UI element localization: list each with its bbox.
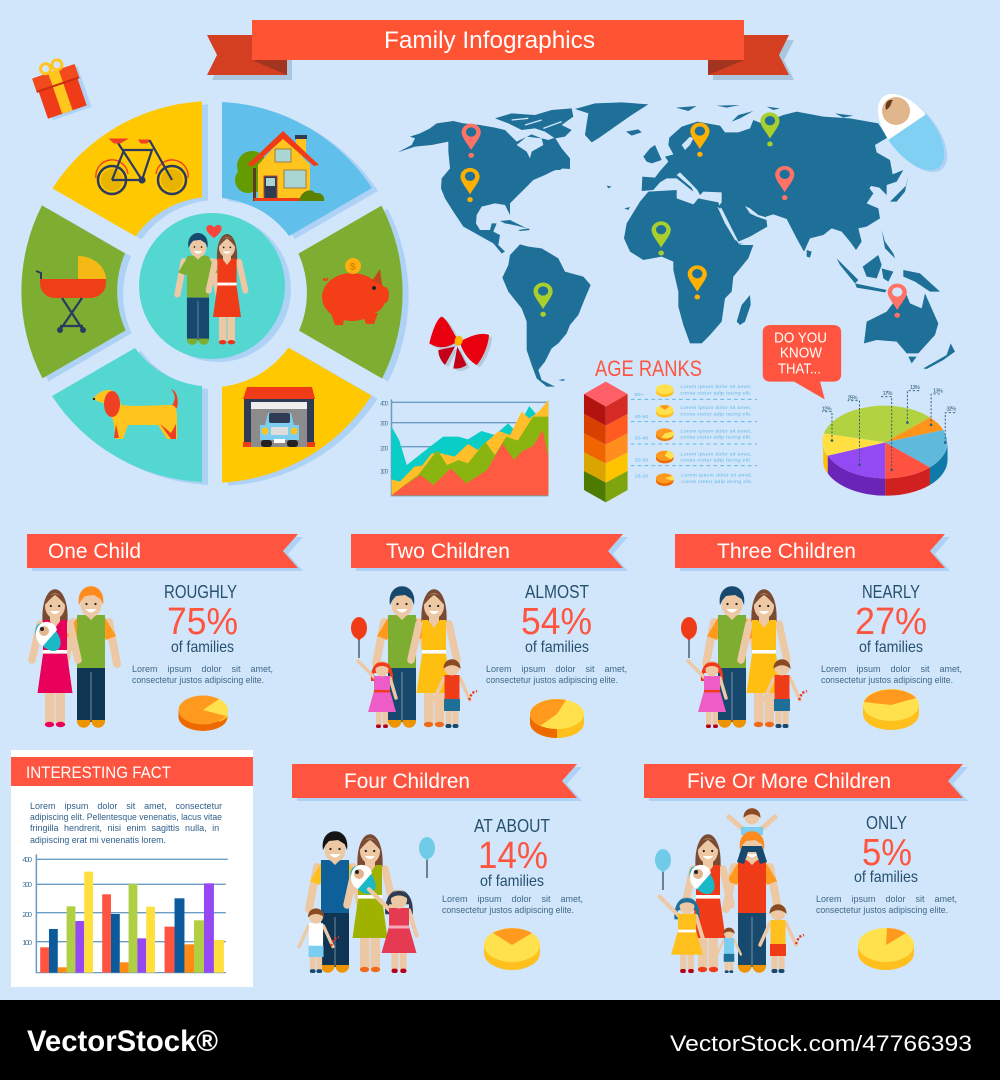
3D pie chart: 25% <box>848 396 858 402</box>
segment: house <box>222 102 372 236</box>
family figures <box>351 586 477 728</box>
3D pie chart: 13% <box>910 385 920 391</box>
age rows: conse ctetur adip iscing elit. <box>680 458 752 464</box>
age rows: Lorem ipsum dolor sit amet, <box>680 452 752 457</box>
3D pie chart: 32% <box>946 407 957 413</box>
area chart: 200 <box>380 446 389 453</box>
center circle <box>139 213 291 362</box>
age rows: conse ctetur adip iscing elit. <box>680 391 752 396</box>
child legs <box>737 846 767 864</box>
header: INTERESTING FACT <box>26 763 171 782</box>
segment: stroller <box>0 181 159 378</box>
segment: savings <box>265 206 457 403</box>
ribbon: One Child <box>48 540 141 563</box>
area chart <box>380 399 548 496</box>
ribbon <box>351 534 628 571</box>
footer watermark bar: VectorStock® <box>27 1025 218 1058</box>
family figures <box>681 586 807 728</box>
statistic: Lorem ipsum dolor sit amet, <box>132 664 273 674</box>
section: one child <box>27 534 303 731</box>
statistic <box>486 582 627 685</box>
statistic: consectetur justos adipiscing elite. <box>821 675 953 685</box>
panel: interesting fact <box>11 750 253 987</box>
age rows: 40-50 <box>634 414 648 420</box>
speech bubble <box>763 325 841 399</box>
statistic: ALMOST <box>525 582 589 602</box>
mini pie <box>858 928 914 970</box>
paragraph: adipiscing elit. Pellentesque venenatis, lacus vitae <box>30 812 222 822</box>
statistic: Lorem ipsum dolor sit amet, <box>821 664 962 674</box>
paragraph: Lorem ipsum dolor sit amet, consectetur <box>30 801 222 811</box>
statistic <box>821 582 962 685</box>
heading: age ranks: AGE RANKS <box>595 356 702 381</box>
icon: red bow <box>429 317 492 371</box>
statistic: consectetur justos adipiscing elite. <box>816 905 948 915</box>
icon: house <box>235 131 324 201</box>
3D pie chart: 12% <box>822 407 832 412</box>
bar chart: 100 <box>22 938 32 947</box>
hudson bay <box>517 137 543 158</box>
section: four children <box>292 764 583 973</box>
statistic <box>816 813 957 915</box>
bar chart: 300 <box>22 880 32 889</box>
section: two children <box>351 534 628 738</box>
statistic: of families <box>854 869 918 886</box>
age rows: Lorem ipsum dolor sit amet, <box>680 429 752 434</box>
statistic: 14% <box>478 835 548 877</box>
statistic: Lorem ipsum dolor sit amet, <box>816 894 957 904</box>
area chart: 300 <box>380 421 389 427</box>
age rows: 20-30 <box>634 458 648 464</box>
age rows: conse ctetur adip iscing elit. <box>680 435 752 441</box>
3D pie chart: 17% <box>882 391 893 397</box>
segment: dog <box>52 348 202 482</box>
ribbon <box>644 764 968 801</box>
statistic: 75% <box>167 601 238 643</box>
family figures <box>30 586 117 728</box>
ribbon <box>292 764 582 801</box>
ribbon: Two Children <box>386 540 510 563</box>
ribbon: Four Children <box>344 770 470 793</box>
footer watermark bar: VectorStock.com/47766393 <box>670 1031 972 1056</box>
bar chart <box>22 854 228 973</box>
icon: stroller <box>36 256 106 333</box>
statistic: Lorem ipsum dolor sit amet, <box>442 894 583 904</box>
mini pie <box>530 699 584 738</box>
segment: bicycle <box>52 58 244 255</box>
ribbon: Five Or More Children <box>687 770 891 793</box>
age rows: Lorem ipsum dolor sit amet, <box>680 405 752 411</box>
charts row <box>380 325 957 502</box>
age rows: 50+ <box>634 392 644 398</box>
pie leader lines <box>822 391 956 470</box>
icon: piggy bank <box>322 258 389 325</box>
section: three children <box>675 534 962 730</box>
statistic: of families <box>480 873 544 890</box>
statistic: consectetur justos adipiscing elite. <box>486 675 618 685</box>
statistic <box>442 816 583 915</box>
icon: garage with car <box>243 387 315 447</box>
3D pie chart: 13% <box>933 389 943 394</box>
statistic: ROUGHLY <box>164 582 237 602</box>
title ribbon <box>207 20 794 80</box>
statistic: 27% <box>855 601 927 643</box>
stacked tower <box>584 382 628 502</box>
speech bubble: DO YOU <box>774 330 827 346</box>
child on shoulders <box>729 808 775 835</box>
ribbon <box>27 534 303 571</box>
ribbon: Three Children <box>717 540 856 563</box>
statistic: of families <box>171 639 234 656</box>
icon: dog <box>92 389 178 439</box>
americas and greenland <box>398 102 648 387</box>
age rows: conse ctetur adip iscing elit. <box>681 479 752 485</box>
statistic: 5% <box>862 832 912 874</box>
statistic: ONLY <box>866 813 907 833</box>
3D pie chart <box>822 385 957 496</box>
ribbon <box>675 534 950 571</box>
wheel segment shadows <box>0 61 463 529</box>
statistic: AT ABOUT <box>474 816 550 836</box>
age rows: 30-40 <box>634 436 648 441</box>
age rows <box>631 384 757 486</box>
segment: garage <box>180 329 372 526</box>
statistic: NEARLY <box>862 582 920 602</box>
inland seas <box>682 137 767 245</box>
mini pie <box>178 696 228 731</box>
icon: gift box <box>29 54 92 122</box>
mini pie <box>484 928 540 970</box>
bar chart: 400 <box>22 855 32 864</box>
title text: Family Infographics <box>384 27 595 54</box>
speech bubble: KNOW <box>780 346 822 361</box>
age rows: Lorem ipsum dolor sit amet, <box>681 473 752 479</box>
couple <box>177 225 245 345</box>
family figures <box>299 831 435 973</box>
statistic: Lorem ipsum dolor sit amet, <box>486 664 627 674</box>
statistic: consectetur justos adipiscing elite. <box>442 905 574 915</box>
age rows: conse ctetur adip iscing elit. <box>680 412 752 417</box>
statistic: 54% <box>521 601 592 643</box>
paragraph: adipiscing erat mi venenatis lorem. <box>30 835 166 845</box>
paragraph: fringilla hendrerit, nisi enim sagittis nulla, in <box>30 823 219 833</box>
bar chart: 200 <box>22 910 32 919</box>
statistic: consectetur justos adipiscing elite. <box>132 675 264 685</box>
age rows: Lorem ipsum dolor sit amet, <box>680 384 752 390</box>
family figures <box>655 808 804 973</box>
icon: swaddled baby <box>878 94 947 172</box>
statistic: of families <box>859 639 923 656</box>
mini pie <box>863 689 919 730</box>
map pins <box>460 112 907 318</box>
footer watermark bar <box>0 1000 1000 1080</box>
world map <box>398 102 955 387</box>
speech bubble: THAT... <box>778 361 821 377</box>
statistic <box>132 582 273 685</box>
age rows: 18-20 <box>634 474 648 479</box>
icon: piggy bank: $ <box>350 262 356 273</box>
area chart: 100 <box>380 469 389 475</box>
panel: family wheel <box>0 58 463 529</box>
paragraph <box>30 801 222 845</box>
eurasia africa oceania <box>624 105 955 369</box>
header <box>11 757 253 786</box>
area chart: 400 <box>380 401 389 407</box>
statistic: of families <box>525 639 589 656</box>
section: five or more children <box>644 764 968 973</box>
icon: bicycle <box>96 139 188 194</box>
